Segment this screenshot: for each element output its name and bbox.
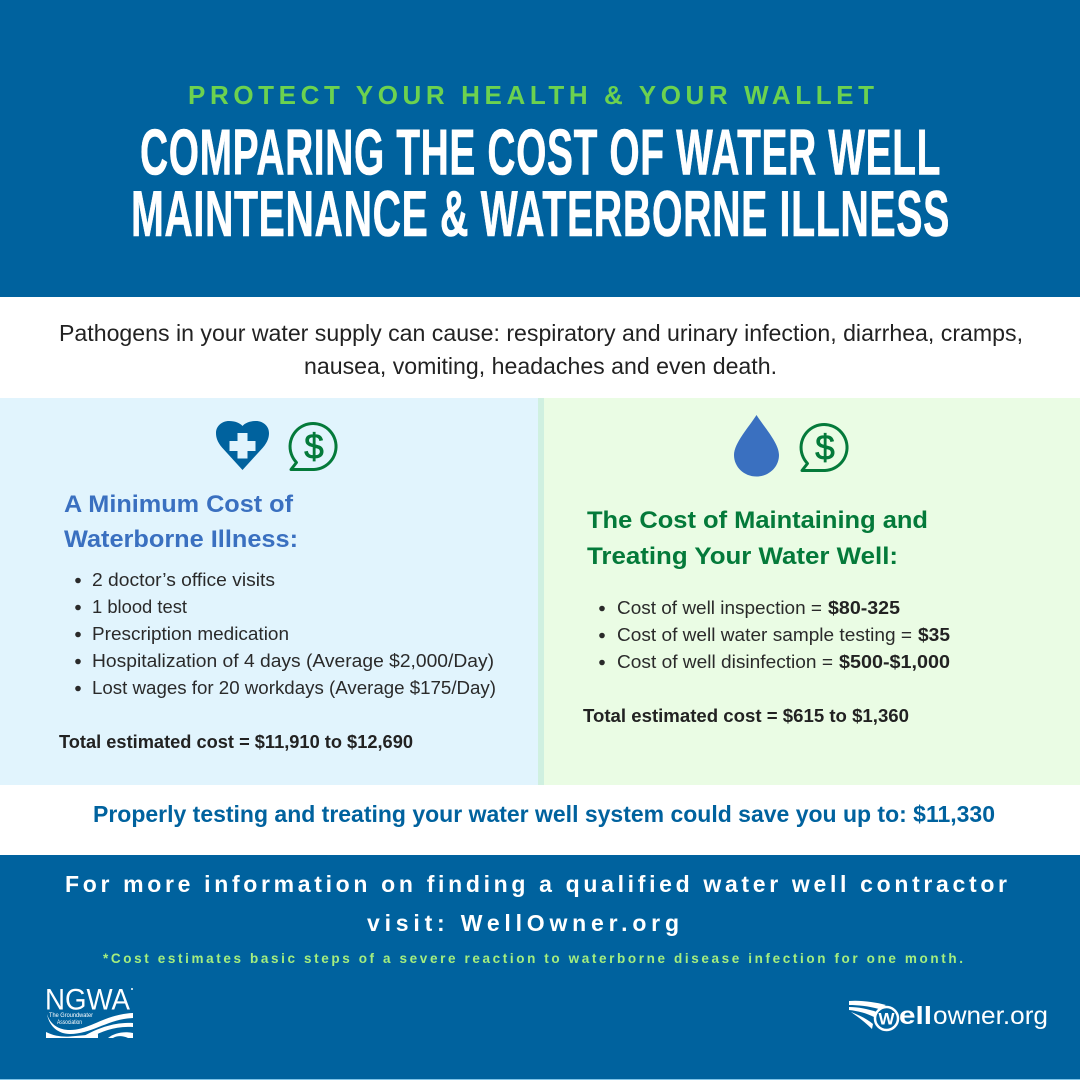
logo: WellOwner.org: W [878, 1010, 895, 1028]
total: maintenance cost: Total estimated cost = $615 to $1,360 [583, 706, 909, 726]
bullet list: illness costs: 2 doctor’s office visits [92, 570, 275, 590]
contact text: visit: WellOwner.org [367, 910, 679, 936]
contact text [65, 871, 1007, 936]
intro text: Pathogens in your water supply can cause: respiratory and urinary infection, diarrhea, cramps, [59, 320, 1023, 346]
icon: water drop [734, 415, 779, 476]
total: illness cost: Total estimated cost = $11,910 to $12,690 [59, 732, 413, 752]
bullet list: maintenance costs [599, 598, 950, 672]
icon: dollar speech bubble [290, 424, 336, 470]
bullet list: illness costs: Lost wages for 20 workdays (Average $175/Day) [92, 678, 496, 698]
bullet list: illness costs: 1 blood test [92, 597, 187, 617]
footer band [0, 855, 1080, 1080]
savings callout: Properly testing and treating your water well system could save you up to: $11,330 [93, 801, 995, 827]
heading: minimum cost of illness: Waterborne Illness: [64, 526, 298, 553]
logo: NGWA: NGWA [45, 984, 130, 1016]
logo: NGWA: Association [57, 1019, 82, 1026]
icon: dollar speech bubble: $ [304, 428, 324, 466]
bullet list: illness costs: Prescription medication [92, 624, 289, 644]
bullet list: maintenance costs: $80-325 [828, 598, 900, 618]
heading: minimum cost of illness [64, 491, 298, 553]
header band [0, 0, 1080, 297]
bullet list: illness costs [75, 570, 496, 698]
bullet list: maintenance costs: $500-$1,000 [839, 652, 950, 672]
heading: cost of maintaining: The Cost of Maintaining and [587, 507, 928, 534]
bullet list: maintenance costs: $35 [918, 625, 950, 645]
intro text: nausea, vomiting, headaches and even death. [304, 353, 777, 379]
logo: WellOwner.org: owner.org [933, 1002, 1048, 1030]
bullet list: illness costs: Hospitalization of 4 days (Average $2,000/Day) [92, 651, 494, 671]
logo: NGWA: The Groundwater [49, 1012, 94, 1019]
icon: heart with medical cross [216, 421, 269, 470]
logo: WellOwner.org [849, 1001, 1048, 1030]
logo: NGWA [45, 984, 133, 1038]
panel: cost of waterborne illness [0, 398, 538, 785]
title [131, 116, 950, 250]
bullet list: maintenance costs: Cost of well water sample testing = [617, 625, 912, 645]
heading: cost of maintaining: Treating Your Water Well: [587, 543, 898, 570]
eyebrow heading: PROTECT YOUR HEALTH & YOUR WALLET [188, 80, 874, 110]
bullet list: maintenance costs: Cost of well inspection = [617, 598, 822, 618]
icon: dollar speech bubble: $ [815, 428, 835, 468]
bullet list: maintenance costs: Cost of well disinfection = [617, 652, 833, 672]
footnote: *Cost estimates basic steps of a severe reaction to waterborne disease infection for one month. [103, 951, 963, 966]
intro text [59, 320, 1023, 379]
logo: WellOwner.org: ell [899, 1002, 932, 1030]
panel: cost of well maintenance [544, 398, 1080, 785]
heading: cost of maintaining [587, 507, 928, 570]
heading: minimum cost of illness: A Minimum Cost of [64, 491, 294, 518]
contact text: For more information on finding a qualified water well contractor [65, 871, 1007, 897]
icon: dollar speech bubble [801, 425, 847, 470]
